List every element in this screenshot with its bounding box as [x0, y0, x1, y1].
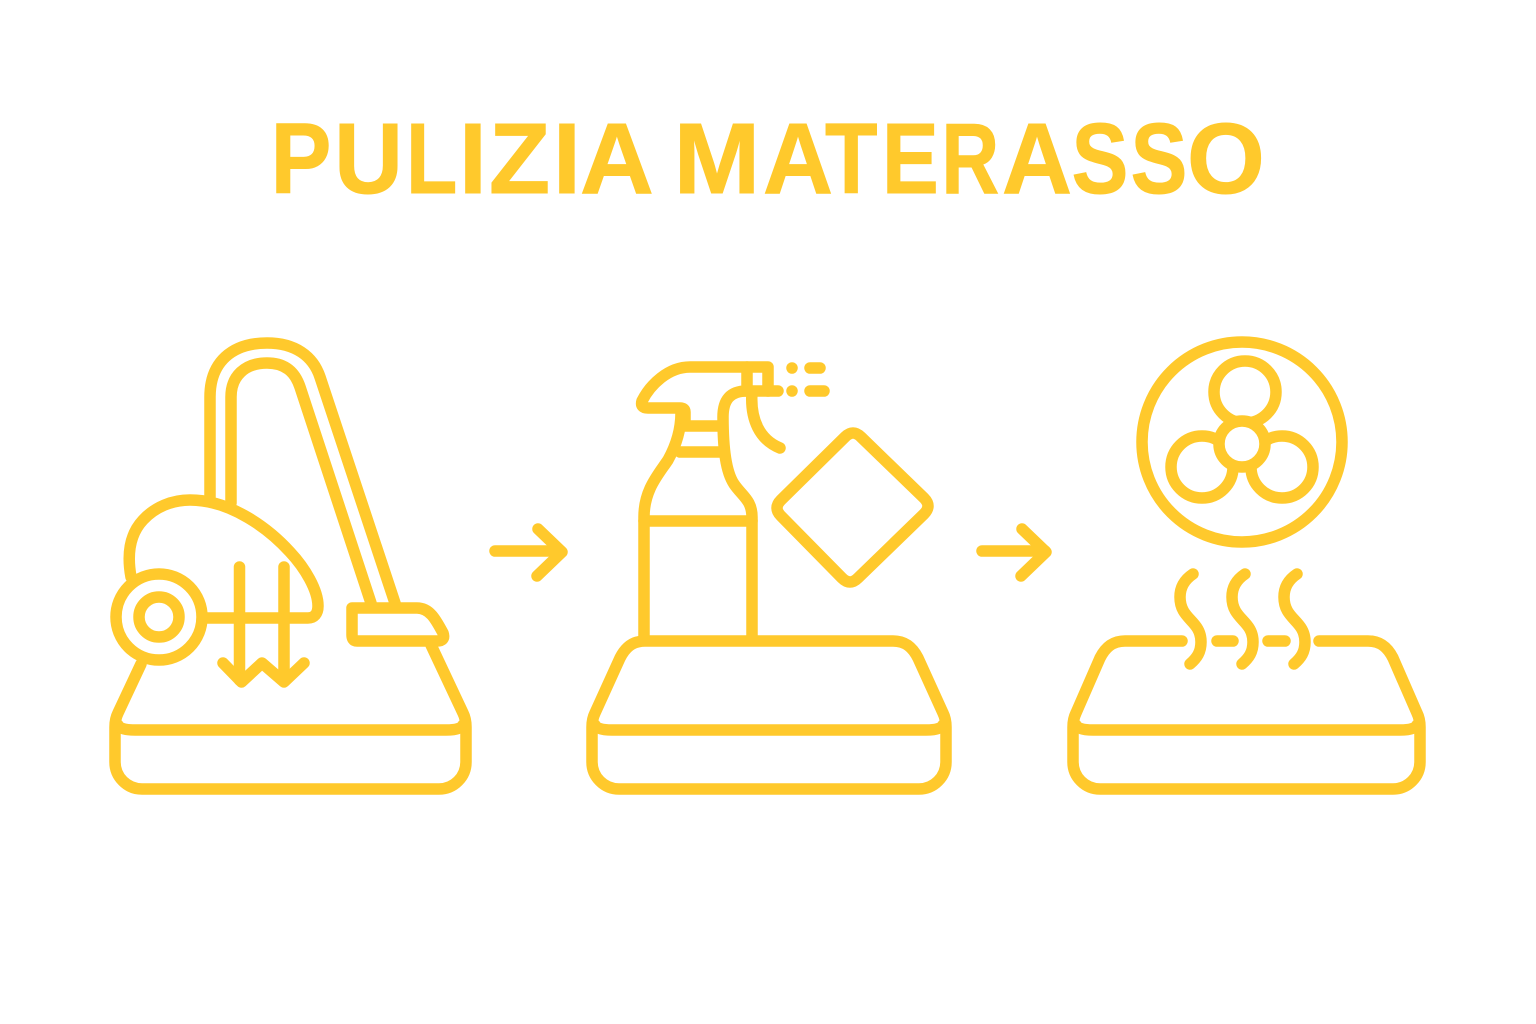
- title: T: [825, 103, 878, 215]
- title: M: [674, 103, 760, 215]
- title: I: [553, 103, 581, 215]
- title: L: [406, 103, 457, 215]
- title: P: [271, 103, 331, 215]
- title: U: [334, 103, 403, 215]
- icon: steam waves: [1180, 574, 1305, 664]
- title: I: [459, 103, 487, 215]
- panel: vacuum on mattress: [115, 343, 466, 789]
- title: A: [1002, 103, 1072, 215]
- arrow: step two to step three: [982, 529, 1046, 576]
- icon: spray bottle: [642, 367, 780, 637]
- title: S: [1131, 103, 1187, 215]
- icon: spray droplets: [792, 368, 824, 391]
- title: R: [941, 103, 999, 215]
- icon: mattress three: [1073, 641, 1420, 789]
- panel: airing mattress with fan: [1073, 342, 1420, 789]
- title: A: [763, 103, 833, 215]
- icon: sponge: [777, 433, 928, 582]
- icon: mattress one: [115, 645, 466, 789]
- icon: fan: [1142, 342, 1342, 542]
- title: S: [1072, 103, 1128, 215]
- icon: mattress two: [592, 641, 946, 789]
- title: Z: [489, 103, 550, 215]
- title: O: [1187, 103, 1265, 215]
- panel: spray and sponge on mattress: [592, 367, 946, 789]
- icon: vacuum nozzle: [352, 608, 444, 641]
- icon: suction arrows: [223, 567, 304, 682]
- icon: vacuum wheel: [116, 574, 202, 660]
- title: E: [882, 103, 939, 215]
- title: A: [580, 103, 652, 215]
- icon: vacuum hose: [210, 343, 395, 603]
- arrow: step one to step two: [495, 529, 562, 576]
- icon: vacuum body: [129, 500, 318, 618]
